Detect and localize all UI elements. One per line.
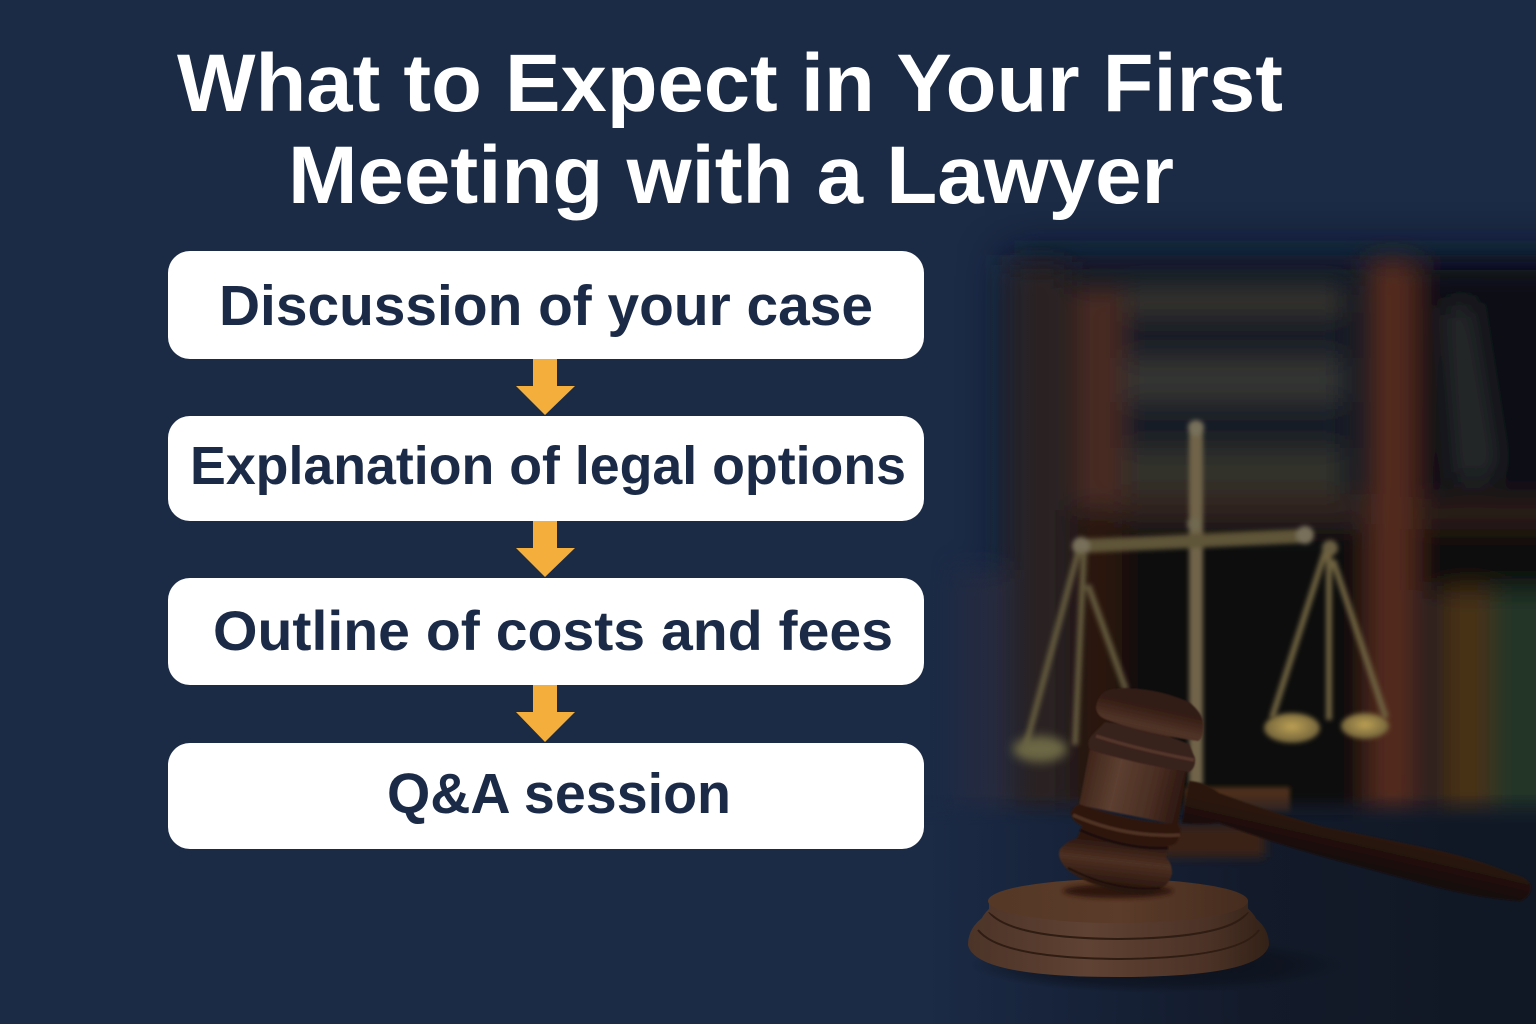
title: Meeting with a Lawyer — [288, 130, 1174, 221]
step 4: Q&A session — [168, 743, 924, 849]
step 2: explanation of legal options: Explanation of legal options — [190, 436, 906, 496]
title — [177, 38, 1283, 221]
step 3: outline of costs and fees: Outline of costs and fees — [213, 599, 893, 662]
arrow: step 1 to step 2 — [516, 358, 575, 415]
sound block — [968, 879, 1269, 977]
gavel head — [1059, 688, 1203, 894]
title: What to Expect in Your First — [177, 38, 1283, 129]
step 2: explanation of legal options — [168, 416, 924, 521]
book block behind gavel — [1185, 787, 1290, 812]
icon: gavel and sound block — [968, 688, 1531, 993]
table surface — [1016, 799, 1536, 1024]
step flow — [168, 251, 924, 849]
arrow: step 3 to step 4 — [516, 684, 575, 742]
sound block shadow — [970, 937, 1350, 993]
icon: scales of justice — [1013, 420, 1389, 785]
step 1: discussion of your case — [168, 251, 924, 359]
table reflection — [1160, 825, 1265, 857]
blurred bookshelf photo — [936, 255, 1536, 815]
step 1: discussion of your case: Discussion of your case — [219, 274, 873, 338]
gavel handle — [1182, 781, 1531, 901]
step 3: outline of costs and fees — [168, 578, 924, 685]
step 4: Q&A session: Q&A session — [387, 762, 731, 826]
arrow: step 2 to step 3 — [516, 520, 575, 577]
